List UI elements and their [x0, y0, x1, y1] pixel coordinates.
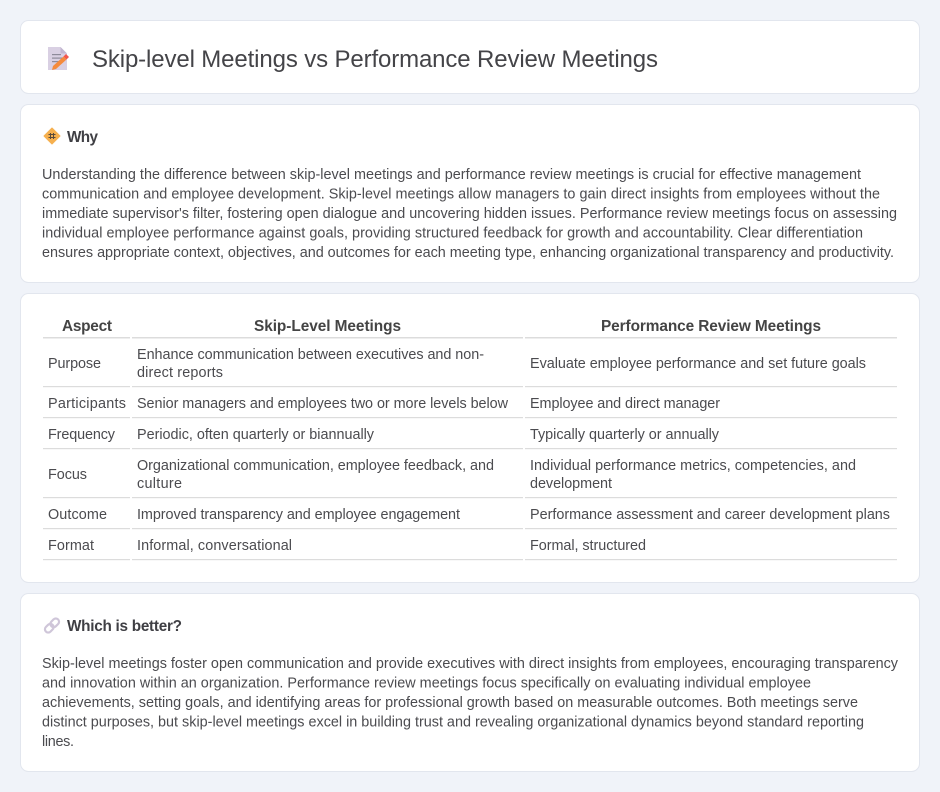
table row: participants — [43, 396, 897, 418]
text block: why paragraph: communication and employee development. Skip-level meetings allow managers to gain direct insights from employees without the — [42, 187, 880, 203]
panel: which is better — [20, 594, 920, 772]
table row: outcome — [43, 507, 897, 529]
table row: focus: Individual performance metrics, competencies, and — [530, 458, 856, 474]
heading: which is better: Which is better? — [67, 618, 182, 635]
table row: format: Format — [48, 538, 94, 554]
text block: which is better paragraph: achievements, setting goals, and identifying areas for professional growth based on measurable outcomes. Both meetings serve — [42, 695, 858, 711]
table row: focus: development — [530, 476, 612, 492]
table row: format: Informal, conversational — [137, 538, 292, 554]
text block: which is better paragraph: distinct purposes, but skip-level meetings excel in building trust and revealing organizational dynamics beyond standard reporting — [42, 715, 864, 731]
icon: document with pencil — [48, 47, 69, 70]
table row: focus: Focus — [48, 467, 87, 483]
text block: why paragraph: immediate supervisor's filter, fostering open dialogue and uncovering hidden issues. Performance review meetings focus on assessing — [42, 206, 897, 222]
text block: why paragraph: individual employee performance against goals, providing structured feedback for growth and accountability. Clear differentiation — [42, 226, 863, 242]
text block: why paragraph — [42, 167, 897, 261]
icon: chain link — [44, 617, 60, 634]
panel: title card — [20, 20, 920, 94]
table row: participants: Participants — [48, 396, 126, 412]
text block: which is better paragraph: lines. — [42, 734, 74, 750]
panel: comparison table — [20, 294, 920, 582]
table row: format: Formal, structured — [530, 538, 646, 554]
table row: frequency — [43, 427, 897, 449]
table row: purpose: direct reports — [137, 365, 223, 381]
table row: focus: culture — [137, 476, 182, 492]
text block: which is better paragraph: and innovation within an organization. Performance review meetings focus specifically on evaluating individual employee — [42, 676, 811, 692]
table row: outcome: Outcome — [48, 507, 107, 523]
title: Skip-level Meetings vs Performance Review Meetings — [92, 46, 658, 73]
table row: format — [43, 538, 897, 560]
table row: frequency: Frequency — [48, 427, 116, 443]
table row: purpose: Enhance communication between executives and non- — [137, 347, 484, 363]
table row: participants: Senior managers and employees two or more levels below — [137, 396, 509, 412]
table row: focus — [43, 458, 897, 498]
table row: outcome: Performance assessment and career development plans — [530, 507, 890, 523]
text block: why paragraph: Understanding the difference between skip-level meetings and performance review meetings is crucial for effective management — [42, 167, 861, 183]
icon: orange diamond sign — [44, 128, 60, 144]
table header row: Skip-Level Meetings — [254, 318, 401, 335]
heading: why: Why — [67, 129, 98, 146]
table row: focus: Organizational communication, employee feedback, and — [137, 458, 494, 474]
panel: why — [20, 104, 920, 282]
table header row: Aspect — [62, 318, 112, 335]
text block: which is better paragraph — [42, 656, 899, 750]
text block: which is better paragraph: Skip-level meetings foster open communication and provide executives with direct insights from employees, encouraging transparency — [42, 656, 899, 672]
table row: frequency: Typically quarterly or annually — [530, 427, 720, 443]
table row: participants: Employee and direct manager — [530, 396, 720, 412]
table row: purpose: Evaluate employee performance and set future goals — [530, 356, 866, 372]
table row: frequency: Periodic, often quarterly or biannually — [137, 427, 375, 443]
table header row — [43, 318, 897, 338]
table header row: Performance Review Meetings — [601, 318, 821, 335]
text block: why paragraph: ensures appropriate context, objectives, and outcomes for each meeting type, enhancing organizational transparency and productivity. — [42, 245, 894, 261]
table row: purpose: Purpose — [48, 356, 101, 372]
table row: outcome: Improved transparency and employee engagement — [137, 507, 460, 523]
table row: purpose — [43, 347, 897, 387]
